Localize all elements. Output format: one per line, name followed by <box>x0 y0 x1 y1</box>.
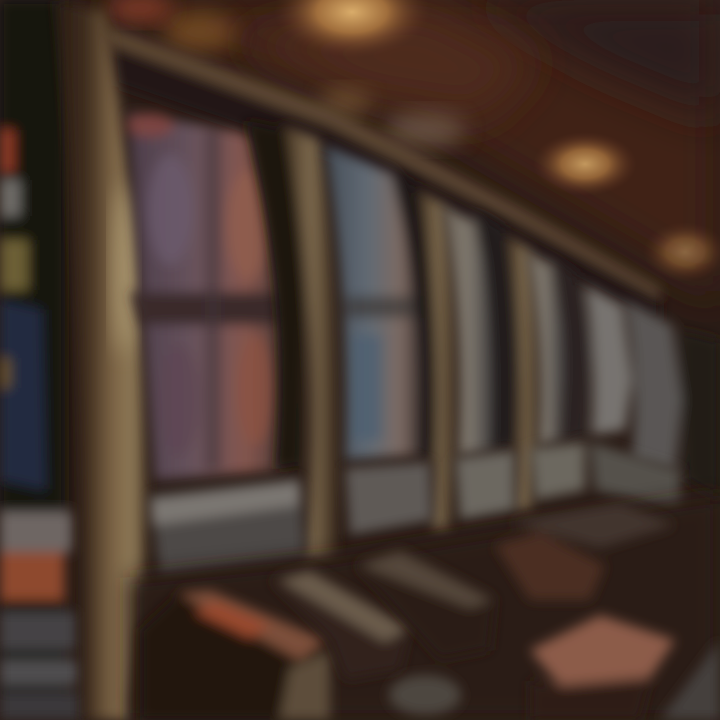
button panel: second <box>270 568 410 680</box>
panel: second machine screen <box>325 145 456 530</box>
left machine lights <box>0 130 14 172</box>
panel: fourth machine screen <box>525 250 720 500</box>
button panel: fourth <box>495 503 675 600</box>
ceiling: warm brown with lights <box>90 0 720 300</box>
floor sheen: bottom right <box>660 640 720 720</box>
floor: lower dark area <box>130 495 720 720</box>
foreground red-topped stool <box>530 615 675 720</box>
icon: ceiling lamp right <box>533 132 637 196</box>
machine bases: grey ledges <box>150 442 680 575</box>
top frame of the machines <box>105 26 660 325</box>
left machine lower panel <box>0 512 72 552</box>
panel: third machine screen <box>442 205 540 510</box>
dark pillar and gold pillar: second <box>245 120 338 560</box>
button panel: first <box>140 588 330 720</box>
panel: left machine <box>0 0 80 720</box>
icon: ceiling lamp far right <box>643 222 720 282</box>
icon: ceiling lamp top <box>274 0 430 58</box>
panel: first machine screen <box>126 112 285 480</box>
button panel: third <box>355 548 495 715</box>
gold pillar: first <box>55 0 147 720</box>
left machine screen: dark blue <box>0 300 46 490</box>
